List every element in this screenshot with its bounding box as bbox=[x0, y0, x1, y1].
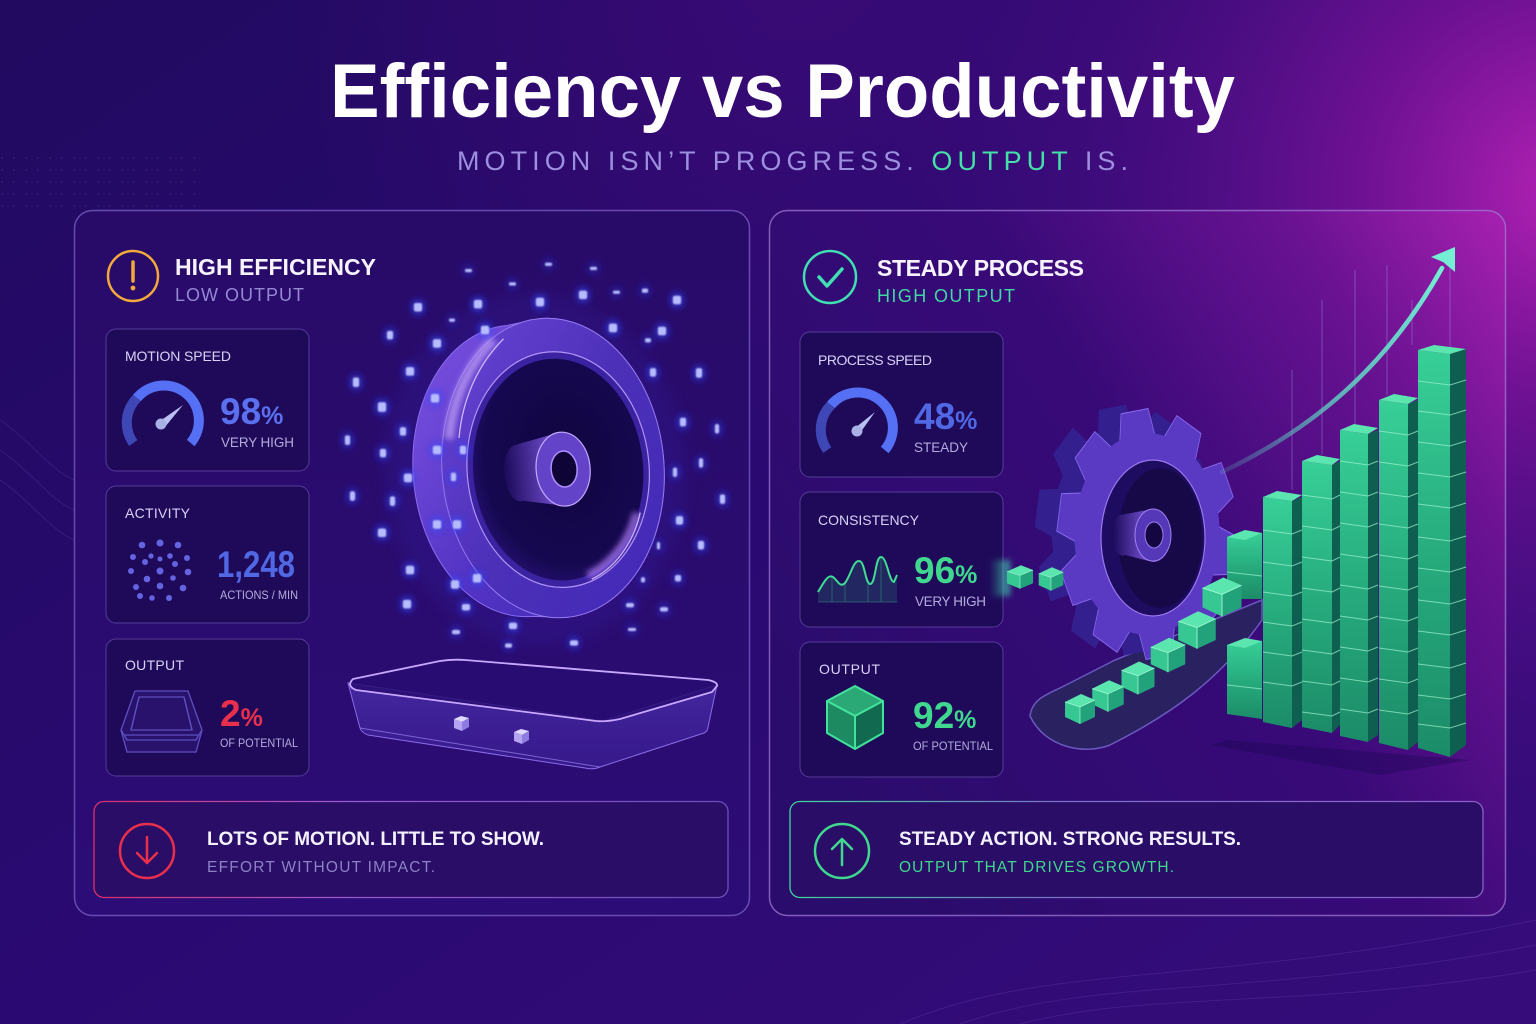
heading: STEADY PROCESS bbox=[877, 255, 1084, 281]
card: output: OF POTENTIAL bbox=[913, 739, 993, 753]
card: output bbox=[106, 639, 309, 776]
title: Efficiency vs Productivity bbox=[330, 49, 1235, 134]
card: output: 2% bbox=[220, 693, 263, 734]
card: consistency: CONSISTENCY bbox=[818, 512, 920, 528]
card: consistency bbox=[800, 492, 1003, 627]
arrow: growth bbox=[1222, 247, 1455, 472]
bar 2 bbox=[1302, 455, 1340, 733]
icon: down arrow bbox=[120, 824, 174, 878]
banner: lots of motion: EFFORT WITHOUT IMPACT. bbox=[207, 859, 435, 876]
card: output: OF POTENTIAL bbox=[220, 736, 298, 750]
heading: HIGH EFFICIENCY bbox=[175, 254, 376, 280]
card: process speed: 48% bbox=[914, 396, 977, 437]
card: activity: 1,248 bbox=[217, 544, 295, 585]
illustration: near-empty tray bbox=[348, 660, 717, 769]
card: activity bbox=[106, 486, 309, 623]
illustration: incoming cubes bbox=[990, 560, 1063, 596]
card: activity: ACTIONS / MIN bbox=[220, 588, 298, 602]
gauge bbox=[127, 385, 199, 443]
card: output: OUTPUT bbox=[819, 661, 880, 677]
subheading: HIGH OUTPUT bbox=[877, 286, 1015, 306]
card: output bbox=[800, 642, 1003, 777]
illustration: conveyor belt bbox=[1030, 600, 1262, 749]
subtitle: MOTION ISN’T PROGRESS. OUTPUT IS. bbox=[457, 146, 1128, 176]
card: output: 92% bbox=[913, 695, 976, 736]
card: consistency: VERY HIGH bbox=[915, 594, 986, 609]
bar 0 bbox=[1227, 530, 1262, 719]
illustration: spinning wheel bbox=[345, 263, 725, 657]
icon: warning bbox=[108, 251, 158, 301]
card: motion speed bbox=[106, 329, 309, 471]
banner: steady action bbox=[790, 802, 1483, 898]
small cubes bbox=[454, 716, 529, 744]
card: motion speed: 98% bbox=[220, 391, 283, 432]
card: motion speed: VERY HIGH bbox=[221, 435, 294, 450]
card: process speed bbox=[800, 332, 1003, 477]
particles bbox=[345, 263, 725, 648]
banner: lots of motion: LOTS OF MOTION. LITTLE TO SHOW. bbox=[207, 829, 544, 850]
sparkline bbox=[818, 557, 897, 602]
card: consistency: 96% bbox=[914, 550, 977, 591]
icon: check bbox=[804, 251, 856, 303]
bar 1 bbox=[1263, 491, 1302, 728]
icon: empty tray bbox=[121, 691, 202, 752]
bar 5 bbox=[1418, 345, 1466, 757]
illustration: bar chart bbox=[1210, 260, 1470, 775]
subheading: LOW OUTPUT bbox=[175, 285, 304, 305]
illustration: cubes on belt bbox=[1065, 578, 1242, 724]
guide lines bbox=[1292, 260, 1450, 490]
icon: green cube bbox=[827, 686, 883, 749]
illustration: gear bbox=[1034, 404, 1238, 660]
panel: steady process bbox=[770, 210, 1506, 916]
banner: lots of motion bbox=[94, 802, 728, 898]
card: motion speed: MOTION SPEED bbox=[125, 348, 231, 364]
icon: dots bbox=[128, 540, 191, 601]
card: process speed: STEADY bbox=[914, 440, 968, 455]
banner: steady action: OUTPUT THAT DRIVES GROWTH. bbox=[899, 859, 1174, 876]
bar 3 bbox=[1340, 424, 1378, 742]
card: activity: ACTIVITY bbox=[125, 505, 191, 521]
banner: steady action: STEADY ACTION. STRONG RESULTS. bbox=[899, 829, 1241, 850]
icon: up arrow bbox=[815, 824, 869, 878]
panel: high efficiency bbox=[74, 210, 750, 916]
gauge bbox=[821, 392, 893, 450]
card: output: OUTPUT bbox=[125, 657, 184, 673]
card: process speed: PROCESS SPEED bbox=[818, 352, 932, 368]
bar 4 bbox=[1379, 394, 1418, 750]
